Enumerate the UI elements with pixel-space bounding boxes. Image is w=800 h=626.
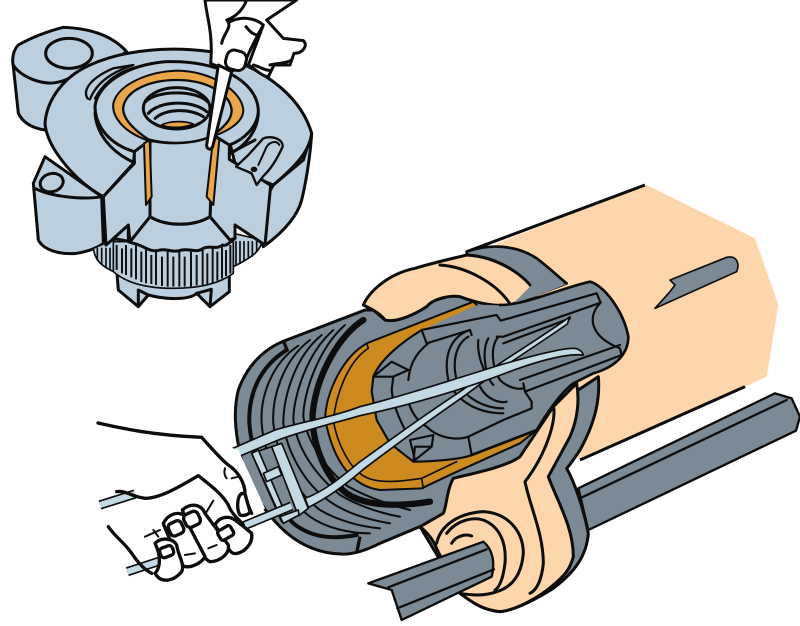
raised ring <box>95 62 258 152</box>
gray snout and nut <box>372 282 628 462</box>
cylinder edge lines <box>467 185 745 460</box>
front shaft <box>368 542 494 620</box>
rods <box>100 494 292 572</box>
main housing <box>235 247 567 554</box>
right cut face <box>210 137 271 245</box>
housing joint ticks <box>283 341 360 553</box>
finger B <box>163 513 205 567</box>
crescent groove <box>86 65 138 99</box>
front left lug <box>33 157 103 254</box>
rear shaft <box>578 393 800 530</box>
peach flange with gray rims <box>420 377 599 612</box>
left cut face <box>103 140 150 245</box>
finger C <box>182 505 228 562</box>
hand white base <box>98 423 265 583</box>
top face of bore <box>123 80 232 143</box>
front gear teeth <box>113 242 233 288</box>
finger A <box>155 539 183 580</box>
rear gear teeth <box>93 233 262 272</box>
brown liner <box>325 302 537 490</box>
slot in cylinder <box>655 257 738 308</box>
peach lobe over housing top <box>363 255 537 321</box>
nut outline and caps <box>372 330 472 462</box>
coil windings <box>249 320 430 537</box>
top illustration: cutaway blue part <box>13 27 312 307</box>
finger D <box>215 517 252 554</box>
snout silhouette <box>372 282 628 462</box>
thumb <box>238 493 250 515</box>
snout channels <box>422 293 622 455</box>
puller clamp <box>252 443 308 523</box>
hand outlines <box>98 423 252 513</box>
hand body <box>205 0 305 77</box>
main body right side <box>253 133 312 247</box>
concentric rings <box>447 330 523 413</box>
rear lug with hole <box>13 27 127 130</box>
nails <box>182 510 202 529</box>
bottom hand and rods <box>98 423 292 583</box>
orange cut strips <box>144 140 152 205</box>
lower flange <box>420 377 599 612</box>
puller tool wires <box>223 317 583 507</box>
boss rings <box>437 512 523 595</box>
creases <box>145 468 238 555</box>
orange seal ring <box>113 71 243 142</box>
top hand and pick <box>205 0 305 149</box>
lower hub with prongs <box>117 270 229 307</box>
hex collar above gear <box>113 217 235 251</box>
pick <box>207 65 232 149</box>
main disc top <box>45 49 312 197</box>
main peach cylinder <box>467 185 778 460</box>
upper gray band <box>467 247 567 295</box>
center cylinder <box>150 135 213 224</box>
snout outline <box>472 282 628 455</box>
threaded bore <box>143 88 210 129</box>
gray outer shell <box>235 293 553 554</box>
slot at right <box>236 137 283 185</box>
fingers <box>222 0 292 70</box>
